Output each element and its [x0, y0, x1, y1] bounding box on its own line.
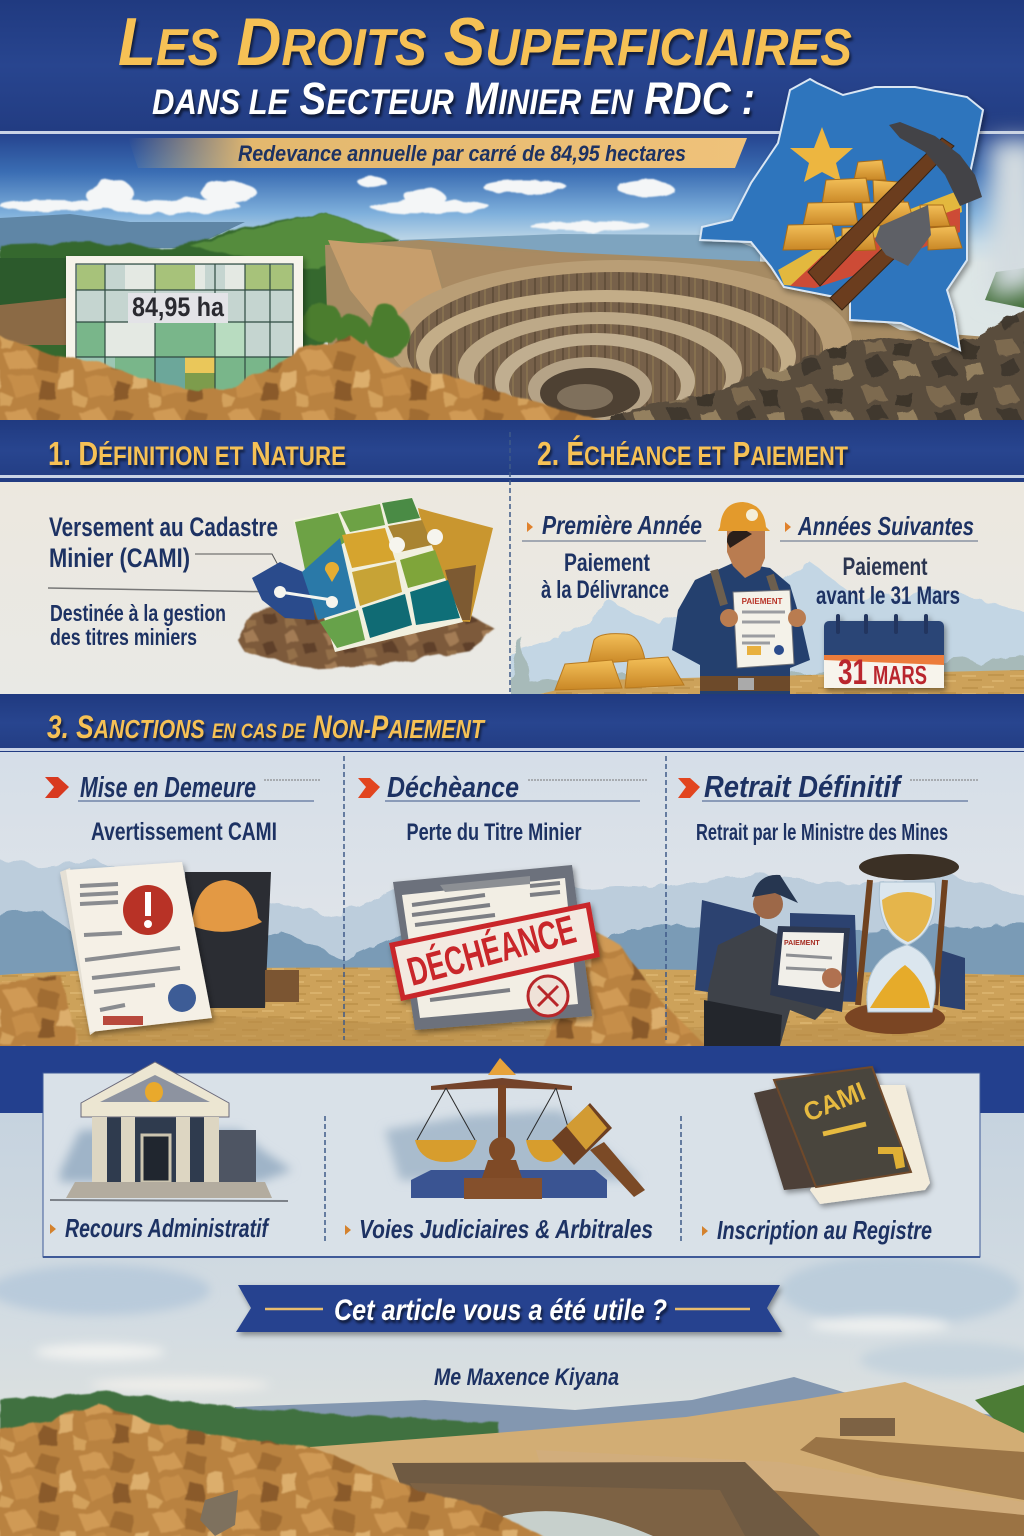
icon: safe: [695, 900, 965, 1010]
gold subtitle ribbon: [128, 138, 747, 168]
icon: hourglass: [845, 854, 959, 1034]
sanction 1: mise en demeure: [45, 772, 320, 1035]
miner: PAIEMENT: [742, 597, 782, 606]
blue device: [252, 562, 315, 620]
gold bars: [783, 160, 962, 251]
column divider: [509, 432, 511, 692]
green hill: [0, 212, 400, 400]
icon: warning document: [60, 862, 212, 1035]
sanction 2: decheance: [358, 772, 648, 1030]
stamp: [392, 905, 597, 998]
hills: [511, 562, 1024, 694]
header band: [0, 0, 1024, 131]
clouds: [0, 176, 673, 231]
call to action ribbon: [236, 1285, 782, 1332]
pickaxe: [808, 138, 954, 286]
subtitle: DANS LE SECTEUR MINIER EN RDC :: [152, 73, 755, 124]
label: area: 84,95 ha: [132, 292, 225, 322]
icon: tablet: [770, 926, 850, 1012]
miner: [672, 502, 810, 694]
distant mountains: [0, 214, 245, 250]
ribbon text: Redevance annuelle par carré de 84,95 hectares: [238, 141, 686, 166]
icon: black board with helmet: [185, 872, 271, 1008]
foreground rocks: [0, 328, 620, 435]
header band repair under scene: [0, 420, 1024, 482]
rock pile: [238, 600, 496, 668]
panel: definition: [0, 482, 510, 694]
icon: scales and gavel: [385, 1058, 645, 1199]
label: recours: [50, 1224, 56, 1234]
navy band behind tools: [0, 1046, 1024, 1113]
question: Cet article vous a été utile ?: [334, 1294, 667, 1327]
bottom mine scene: [0, 1377, 1024, 1536]
panel: payment: [510, 482, 1024, 694]
sanction 1: mise en demeure: Mise en Demeure: [80, 772, 256, 804]
panel: remedies: Recours Administratif: [65, 1213, 270, 1243]
clouds: [0, 1255, 1024, 1392]
sanction 3: retrait definitif: [678, 769, 978, 1046]
icon: officer: [705, 925, 835, 1046]
main title: [118, 4, 852, 124]
icon: courthouse: [50, 1062, 292, 1201]
flag star: [790, 127, 853, 182]
lower sky background: [0, 1113, 1024, 1536]
text: cadastre: Versement au Cadastre: [49, 512, 278, 542]
label: inscription: [702, 1226, 708, 1236]
sanction 2: decheance: Perte du Titre Minier: [406, 819, 582, 846]
sky and open-pit mine scene: [0, 131, 1024, 430]
icon: clipboard: [392, 865, 597, 1030]
calendar: MARS: [873, 660, 927, 690]
heading 1: 1. DÉFINITION ET NATURE: [48, 435, 346, 472]
sanction 2: decheance: Déchèance: [387, 772, 519, 804]
text: 31 mars: Paiement: [842, 553, 928, 581]
trees: [302, 302, 410, 357]
shovel: [830, 235, 908, 310]
panel: payment: Années Suivantes: [797, 511, 974, 541]
author: Me Maxence Kiyana: [434, 1364, 619, 1391]
DRC map with gold, pickaxe and shovel: [700, 79, 1024, 350]
label: voies: [345, 1225, 351, 1235]
held document: [733, 590, 794, 668]
panel: definition: Minier (CAMI): [49, 543, 190, 573]
panel: remedies: Voies Judiciaires & Arbitrales: [359, 1214, 653, 1244]
misty edge: [990, 140, 1024, 300]
cadastral map: [293, 497, 463, 652]
parcel grid map 84,95 ha: [66, 256, 303, 406]
section 3 header band: [0, 694, 1024, 752]
calendar date: 31: [838, 653, 867, 692]
panel: payment: avant le 31 Mars: [816, 582, 960, 610]
panel: definition: des titres miniers: [50, 624, 197, 650]
text: gestion: Destinée à la gestion: [50, 600, 226, 626]
panel: remedies: Inscription au Registre: [717, 1215, 932, 1245]
panel: sanctions background: [0, 752, 1024, 1050]
pit ground: [325, 240, 1024, 420]
map silhouette: [700, 79, 983, 350]
label: annees suivantes: [785, 522, 791, 532]
sanction 1: mise en demeure: Avertissement CAMI: [91, 818, 277, 846]
flag stripes: [778, 190, 962, 287]
panel: remedies: [43, 1058, 980, 1257]
book title: CAMI: [799, 1076, 870, 1128]
icon: clipboard: DÉCHÉANCE: [403, 907, 580, 995]
panel: payment: Première Année: [542, 510, 702, 540]
heading 3: 3. SANCTIONS EN CAS DE NON-PAIEMENT: [47, 709, 486, 745]
dark rocks right: [610, 300, 1024, 430]
dividers: [343, 756, 345, 1040]
terraces: [388, 260, 852, 430]
calendar: [824, 616, 944, 692]
label: premiere annee: [527, 522, 533, 532]
sanction 3: retrait definitif: Retrait Définitif: [704, 769, 902, 804]
icon: cami register book: [754, 1067, 930, 1204]
map pins: [389, 537, 405, 553]
text: delivrance: Paiement: [564, 549, 651, 577]
section headers 1 and 2 band: [0, 435, 1024, 478]
main title: LES DROITS SUPERFICIAIRES: [118, 4, 852, 80]
gold sheet: [418, 508, 493, 622]
gold bars: [555, 634, 684, 690]
panel: payment: à la Délivrance: [541, 576, 669, 604]
heading 2: 2. ÉCHÉANCE ET PAIEMENT: [537, 435, 848, 472]
sanction 3: retrait definitif: PAIEMENT: [784, 940, 820, 947]
